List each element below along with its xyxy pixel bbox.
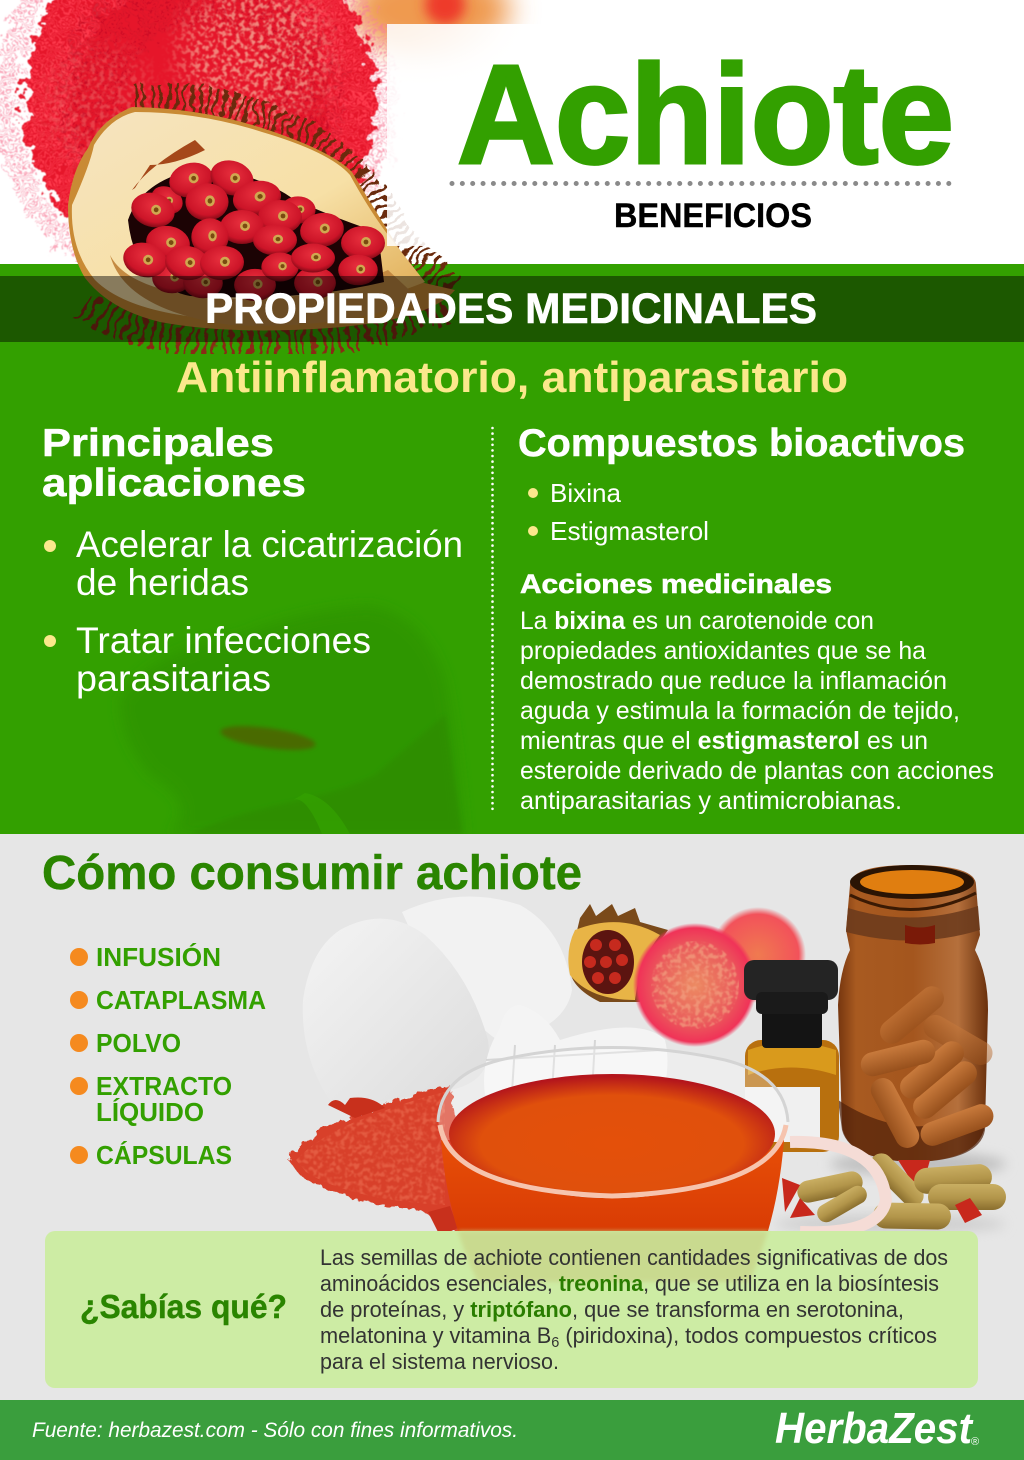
subtitle: BENEFICIOS (614, 197, 812, 235)
pod bottom spikes (85, 305, 450, 346)
compounds list (528, 478, 709, 546)
callout text: de proteínas, y triptófano, que se transforma en serotonina, (320, 1297, 904, 1322)
paragraph: medicinal actions: antiparasitarias y antimicrobianas. (520, 787, 902, 815)
pod lower shell (110, 255, 420, 326)
logo registered mark: ® (971, 1436, 979, 1448)
panel: green properties background (0, 264, 1024, 834)
list: consumption forms: EXTRACTO (96, 1071, 232, 1101)
heading: compounds: Compuestos bioactivos (518, 422, 965, 465)
title: Achiote (457, 35, 954, 193)
image: opened achiote pod with seeds (68, 99, 455, 346)
bullet list: applications (44, 524, 463, 699)
callout text (320, 1245, 948, 1374)
paragraph: medicinal actions: esteroide derivado de plantas con acciones (520, 757, 994, 785)
callout text: para el sistema nervioso. (320, 1349, 559, 1374)
dotted column divider (491, 428, 494, 811)
image: capsules and seeds (775, 1149, 1006, 1234)
pod cream interior (72, 112, 425, 320)
bullet list: applications: de heridas (76, 562, 249, 603)
heading: medicinal actions: Acciones medicinales (520, 569, 832, 599)
list: consumption forms: CÁPSULAS (96, 1140, 232, 1170)
compounds list: Bixina (550, 478, 622, 508)
bullet list: applications: parasitarias (76, 658, 271, 699)
image: big amber capsule bottle (830, 865, 1006, 1176)
callout text: aminoácidos esenciales, treonina, que se utiliza en la biosíntesis (320, 1271, 939, 1296)
seeds (119, 155, 385, 301)
image: small pod (568, 904, 668, 1002)
compounds list: Estigmasterol (550, 516, 709, 546)
image: cup of annatto tea (438, 1048, 886, 1232)
paragraph: medicinal actions: mientras que el estigmasterol es un (520, 727, 928, 755)
callout: did you know (45, 1231, 978, 1388)
list: consumption forms: POLVO (96, 1028, 181, 1058)
image: red fruits (633, 907, 806, 1047)
image: consumption products (288, 865, 1006, 1240)
callout text: Las semillas de achiote contienen cantidades significativas de dos (320, 1245, 948, 1270)
heading: applications: Principales (42, 422, 274, 465)
panel: how to consume (0, 834, 1024, 1400)
bullet list: applications: Acelerar la cicatrización (76, 524, 463, 565)
logo: HerbaZest: HerbaZest (775, 1404, 974, 1453)
heading: how to consume: Cómo consumir achiote (42, 847, 582, 900)
column: bioactive compounds (518, 422, 994, 815)
image: small amber bottle (744, 960, 839, 1152)
paragraph: medicinal actions: aguda y estimula la formación de tejido, (520, 697, 960, 725)
image: front cloth poultice (303, 919, 668, 1108)
paragraph: medicinal actions: La bixina es un carotenoide con (520, 607, 874, 635)
seed cavity (128, 171, 384, 297)
paragraph: medicinal actions: demostrado que reduce la inflamación (520, 667, 947, 695)
dark heading band (0, 276, 1024, 342)
pod husk (68, 107, 455, 330)
callout text: melatonina y vitamina B (320, 1323, 559, 1348)
list: consumption forms: INFUSIÓN (96, 942, 221, 972)
callout text: (piridoxina), todos compuestos críticos (559, 1323, 937, 1348)
paragraph: medicinal actions: propiedades antioxidantes que se ha (520, 637, 926, 665)
source note: Fuente: herbazest.com - Sólo con fines informativos. (32, 1419, 518, 1442)
paragraph: medicinal actions (520, 607, 994, 815)
heading: applications: aplicaciones (42, 462, 306, 505)
list: consumption forms: LÍQUIDO (96, 1097, 204, 1127)
callout heading: ¿Sabías qué? (80, 1288, 287, 1325)
image: back cloth poultice (402, 896, 572, 1042)
bullet list: applications: Tratar infecciones (76, 620, 371, 661)
image: arm with wound, green tinted (120, 606, 464, 834)
pod spikes, top (135, 99, 450, 290)
column: main applications (42, 422, 463, 699)
heading: medicinal properties: PROPIEDADES MEDICINALES (205, 285, 817, 333)
footer (0, 1400, 1024, 1460)
image: red spiky achiote fruit (5, 0, 510, 290)
pod inner brown streak (132, 140, 205, 190)
image: red powder pile (287, 1084, 458, 1231)
callout text: 6 (551, 1334, 559, 1351)
list: consumption forms: CATAPLASMA (96, 985, 266, 1015)
title panel (387, 24, 1024, 246)
list: consumption forms (70, 942, 266, 1170)
subheading: properties: Antiinflamatorio, antiparasitario (176, 353, 848, 402)
dotted divider (452, 181, 950, 186)
